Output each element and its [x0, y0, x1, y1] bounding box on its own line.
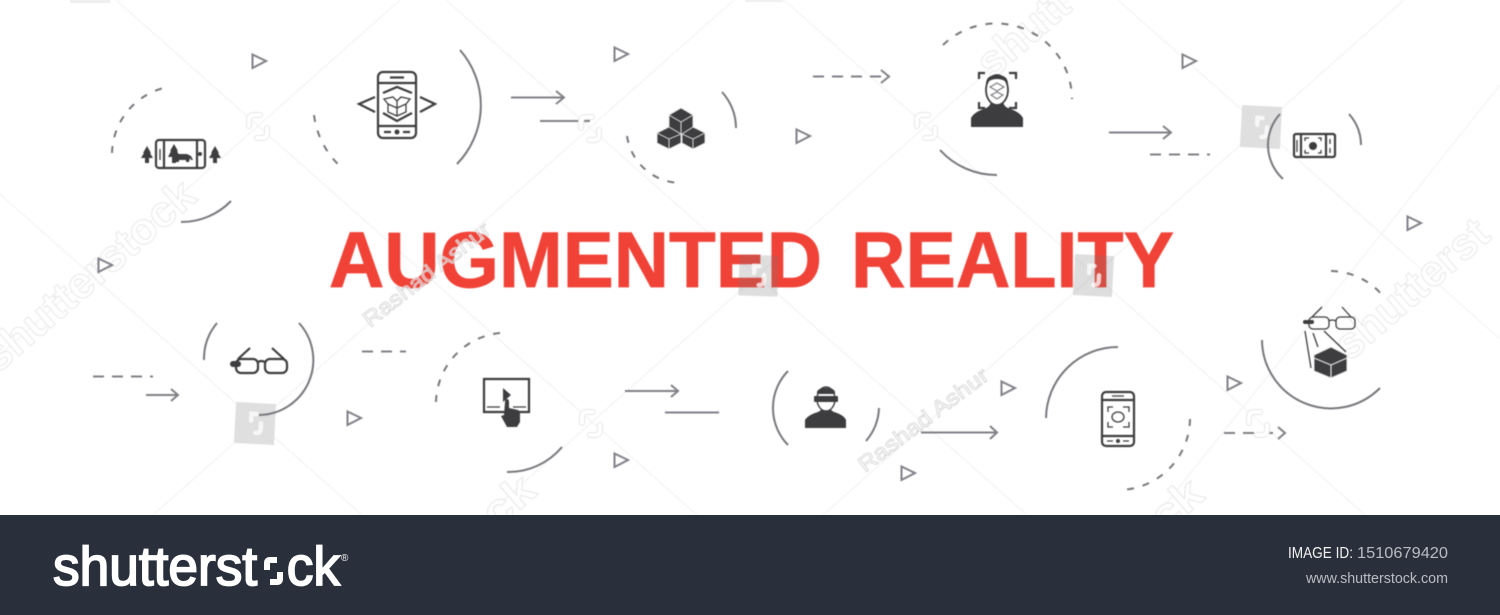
- dashed arc: [1119, 419, 1190, 490]
- triangle marker: [796, 130, 810, 143]
- triangle marker: [1408, 216, 1421, 230]
- icon: glasses: [230, 348, 287, 373]
- solid arc left: [1268, 114, 1283, 179]
- dashed arc: [314, 115, 341, 167]
- icon: phone with AR box: [359, 72, 435, 138]
- panel: step 1, AR landscape phone: [112, 87, 231, 222]
- watermark: shutterstock text, bottom centre: ck: [471, 464, 546, 538]
- icon: face scan person: [971, 73, 1023, 127]
- arrow: solid right: [511, 91, 564, 104]
- triangle marker: [98, 258, 112, 272]
- arrow: dashed right: [1224, 427, 1285, 439]
- solid arc right: [259, 323, 313, 415]
- solid arc left: [204, 323, 217, 360]
- solid arc: [1262, 340, 1380, 408]
- panel: step 9, phone scan: [1046, 347, 1190, 490]
- title: AUGMENTED: [329, 215, 822, 304]
- watermark logo mark: [582, 412, 600, 435]
- icon: glasses and cube: [1303, 307, 1355, 378]
- arrow: dashed right: [813, 70, 889, 83]
- footer logo: registered mark: ®: [341, 553, 349, 564]
- icon: landscape phone with scan: [1294, 134, 1335, 157]
- watermark logo mark: [917, 115, 935, 138]
- icon: phone with bear and trees: [141, 140, 221, 168]
- line: dashed connector: [93, 376, 153, 378]
- solid arc: [1046, 347, 1118, 418]
- watermark: contributor name, title: Rashad Ashur: [358, 217, 495, 332]
- dashed arc: [627, 136, 681, 183]
- panel: footer bar: [0, 515, 1500, 615]
- icon: three stacked cubes: [657, 108, 705, 149]
- image id number: 1510679420: [1357, 545, 1448, 562]
- dashed arc: [436, 333, 500, 402]
- line: dashed connector: [1150, 154, 1210, 156]
- watermark logo mark: [249, 115, 267, 138]
- solid arc left: [773, 371, 788, 445]
- title: REALITY: [851, 215, 1174, 304]
- image id: IMAGE ID:: [1288, 545, 1353, 562]
- line: dashed connector: [362, 350, 406, 352]
- solid arc: [507, 447, 562, 472]
- triangle marker: [1182, 54, 1196, 68]
- solid arc right: [1349, 114, 1361, 145]
- website url: www.shutterstock.com: [1305, 570, 1448, 587]
- panel: step 2, AR phone with box: [314, 50, 481, 167]
- line: solid connector: [665, 412, 719, 414]
- triangle marker: [902, 466, 915, 480]
- dashed arc: [1331, 271, 1383, 296]
- arrow: solid right: [625, 385, 678, 397]
- title: [329, 215, 1174, 304]
- watermark: shutterstock text, bottom right: ck: [1139, 468, 1214, 542]
- panel: step 5, phone face scan: [1268, 114, 1361, 179]
- panel: step 4, face recognition: [940, 23, 1072, 175]
- solid arc: [722, 92, 736, 128]
- triangle marker: [1002, 382, 1015, 395]
- panel: step 8, VR headset person: [773, 371, 879, 445]
- arrow: solid right: [1109, 126, 1171, 139]
- watermark tile: title centre: [738, 254, 779, 297]
- triangle marker: [1228, 376, 1241, 390]
- icon: screen with play and hand: [484, 379, 529, 427]
- watermark tile: lower left: [234, 402, 276, 445]
- dashed arc: [943, 23, 1072, 99]
- arrow: solid right: [146, 389, 178, 401]
- triangle marker: [614, 454, 628, 467]
- solid arc right: [866, 408, 879, 441]
- triangle marker: [348, 412, 361, 425]
- line: solid connector: [540, 120, 590, 122]
- panel: step 6, smart glasses: [204, 323, 313, 415]
- footer logo wordmark: shutterstock: [53, 535, 340, 597]
- watermark tile: upper right: [1240, 105, 1282, 149]
- watermark logo mark: [1249, 412, 1267, 435]
- triangle marker: [614, 48, 628, 61]
- footer logo: stylised o: [267, 560, 280, 582]
- panel: step 10, glasses projecting box: [1262, 271, 1383, 408]
- panel: step 3, cubes: [627, 92, 736, 183]
- watermark tile: title right: [1073, 254, 1114, 297]
- icon: person wearing headset: [805, 387, 846, 428]
- watermark: shutterstock text, right: shutterst: [1324, 208, 1499, 370]
- icon: portrait phone with scan frame: [1102, 392, 1134, 446]
- arrow: solid right: [921, 426, 997, 439]
- solid arc: [181, 201, 231, 222]
- panel: step 7, touch video screen: [436, 333, 562, 472]
- watermark logo mark: [581, 117, 599, 140]
- solid arc: [457, 50, 481, 164]
- watermark: contributor name, lower: Rashad Ashur: [853, 363, 993, 477]
- triangle marker: [252, 54, 266, 68]
- solid arc: [940, 150, 997, 175]
- dashed arc: [112, 87, 168, 153]
